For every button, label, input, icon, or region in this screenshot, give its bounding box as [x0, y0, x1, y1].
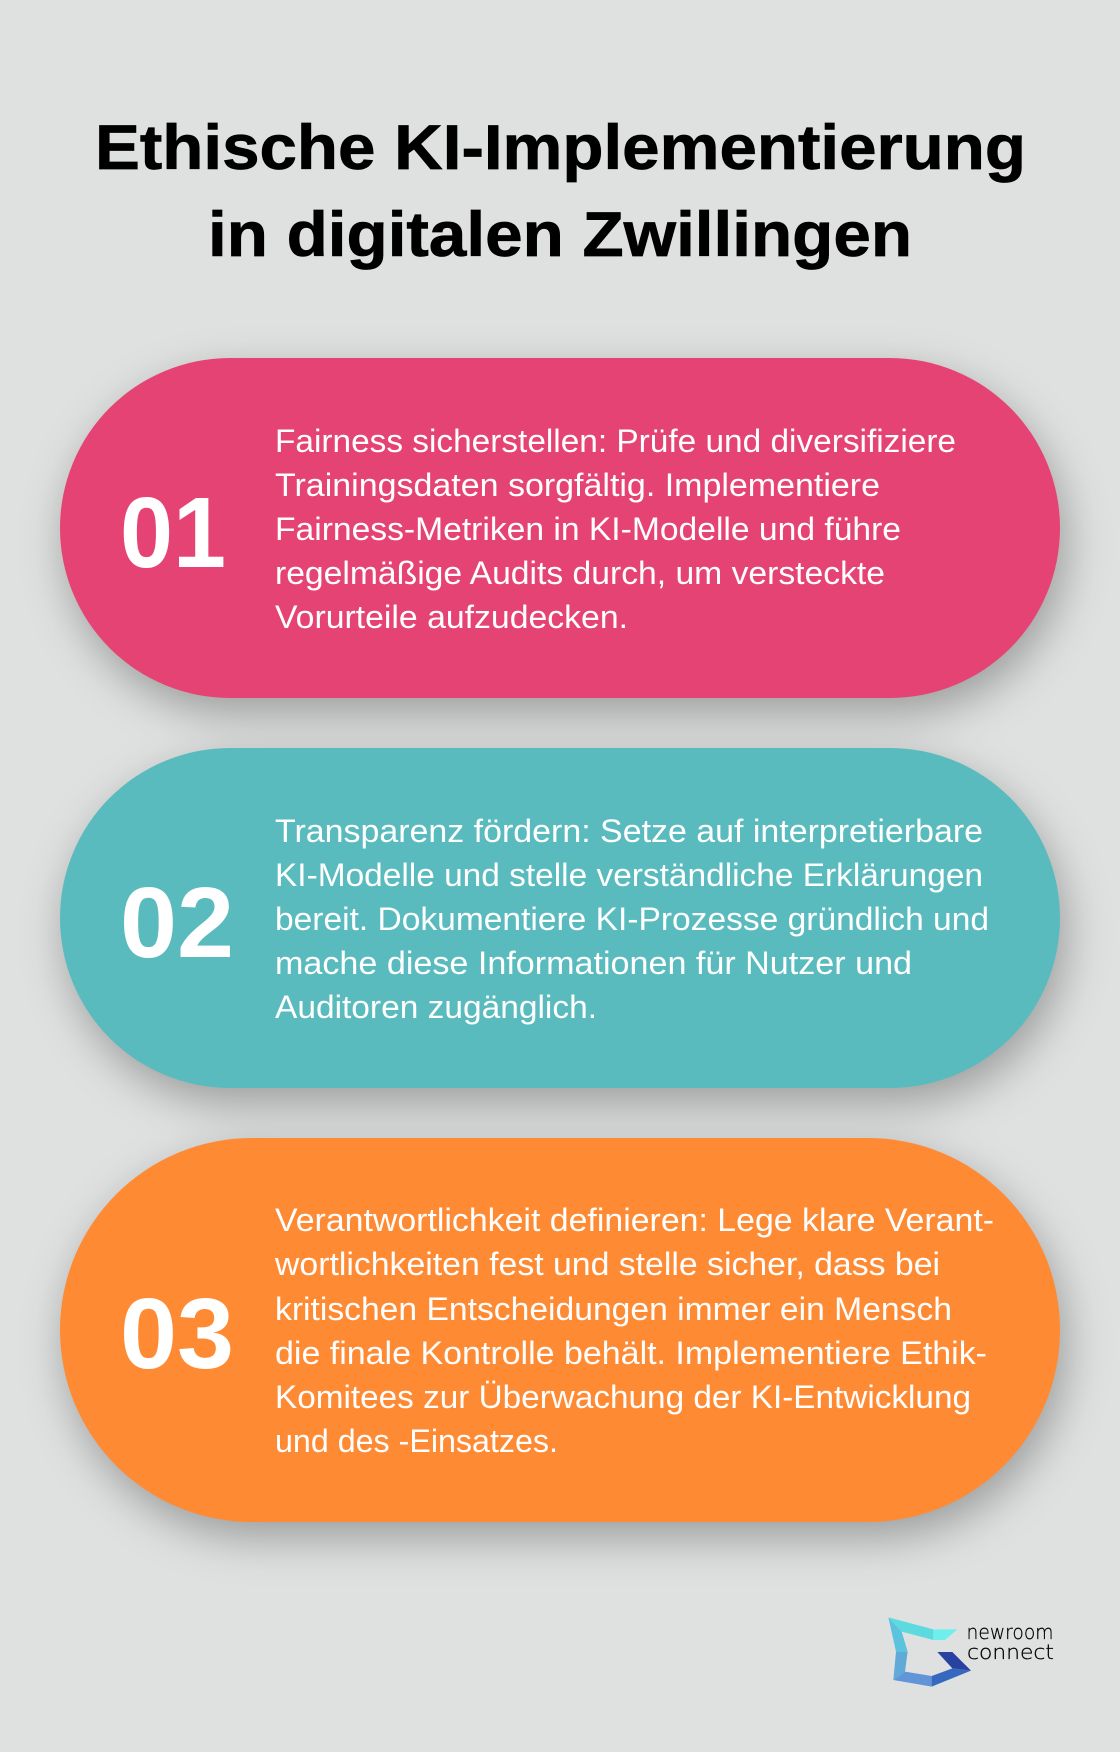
logo: newroom connect: [888, 1617, 1054, 1687]
number 02: 02: [120, 867, 234, 979]
logo wordmark: [966, 1620, 1054, 1664]
text block: fairness: Vorurteile aufzudecken.: [275, 599, 628, 635]
text block: transparency: mache diese Informationen für Nutzer und: [275, 945, 912, 981]
logo wordmark: connect: [967, 1640, 1054, 1664]
panel: 02 transparency: [60, 748, 1060, 1088]
text block: fairness: Fairness-Metriken in KI-Modelle und führe: [275, 511, 901, 547]
panel shadows: [66, 374, 1066, 1538]
logo mark: [888, 1617, 971, 1687]
text block: transparency: bereit. Dokumentiere KI-Prozesse gründlich und: [275, 901, 989, 937]
title: Ethische KI-Implementierung: [95, 113, 1026, 183]
text block: accountability: und des -Einsatzes.: [275, 1423, 558, 1459]
text block: accountability: [274, 1202, 994, 1459]
text block: fairness: Fairness sicherstellen: Prüfe und diversifiziere: [275, 423, 956, 459]
text block: transparency: KI-Modelle und stelle verständliche Erklärungen: [275, 857, 983, 893]
pill background pink: [60, 358, 1060, 698]
text block: accountability: die finale Kontrolle behält. Implementiere Ethik-: [275, 1335, 987, 1371]
text block: accountability: Verantwortlichkeit definieren: Lege klare Verant-: [275, 1202, 994, 1238]
text block: transparency: Auditoren zugänglich.: [275, 989, 597, 1025]
text block: accountability: kritischen Entscheidungen immer ein Mensch: [275, 1291, 952, 1327]
text block: transparency: [275, 813, 989, 1025]
logo wordmark: newroom: [966, 1620, 1054, 1644]
text block: accountability: wortlichkeiten fest und stelle sicher, dass bei: [274, 1246, 940, 1282]
title: [95, 113, 1026, 270]
text block: accountability: Komitees zur Überwachung der KI-Entwicklung: [275, 1379, 971, 1415]
text block: fairness: Trainingsdaten sorgfältig. Implementiere: [275, 467, 880, 503]
title: in digitalen Zwillingen: [208, 200, 912, 270]
panel: 01 fairness: [60, 358, 1060, 698]
text block: fairness: regelmäßige Audits durch, um versteckte: [275, 555, 885, 591]
pill background teal: [60, 748, 1060, 1088]
number 03: 03: [120, 1278, 234, 1390]
number 01: 01: [120, 477, 226, 589]
panel: 03 accountability: [60, 1138, 1060, 1522]
text block: transparency: Transparenz fördern: Setze auf interpretierbare: [275, 813, 983, 849]
pill background orange: [60, 1138, 1060, 1522]
text block: fairness: [275, 423, 956, 635]
